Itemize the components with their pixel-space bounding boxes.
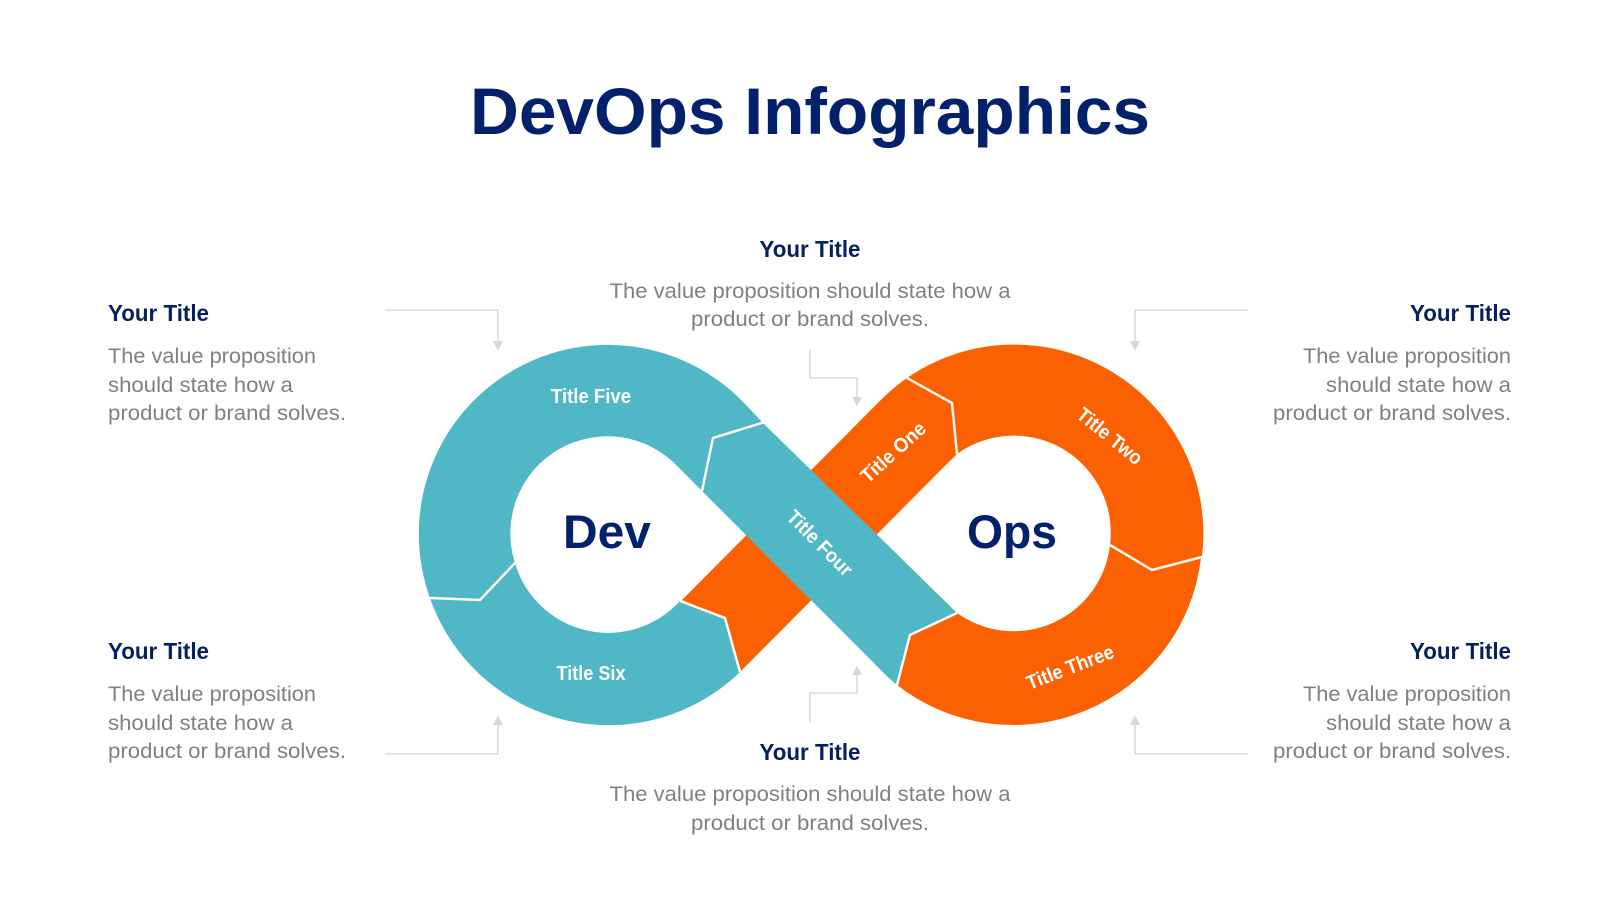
text block: bottom center: product or brand solves. [691, 812, 929, 835]
text block: bottom right: The value proposition [1303, 683, 1511, 706]
segment: Title Four (teal band) [702, 423, 957, 685]
label: Title Two: Title Two [1072, 404, 1147, 470]
label: Title Four: Title Four [782, 506, 857, 581]
text block: bottom right: should state how a [1326, 712, 1511, 735]
label: Ops: Ops [967, 505, 1057, 558]
text block: bottom right: Your Title [1410, 638, 1511, 664]
text block: bottom left: product or brand solves. [108, 740, 346, 763]
arrow: bottom right [1130, 715, 1248, 754]
infinity diagram [419, 345, 1203, 725]
text block: bottom center: Your Title [760, 739, 860, 765]
text block: top right: should state how a [1326, 374, 1511, 397]
text block: top left: Your Title [108, 300, 209, 326]
segment: Title Six [430, 563, 740, 725]
text block: bottom left [108, 638, 346, 763]
arrow: top center [810, 350, 862, 406]
segment: Title One (orange band) [682, 378, 957, 671]
arrow: top right [1130, 310, 1248, 351]
label: Title Six: Title Six [556, 663, 626, 685]
arrow: top left [385, 310, 503, 351]
title: DevOps Infographics [470, 74, 1150, 148]
text block: bottom left: The value proposition [108, 683, 316, 706]
label: Title Five: Title Five [551, 386, 631, 408]
segment: Title Three [897, 545, 1201, 725]
text block: top left: product or brand solves. [108, 402, 346, 425]
text block: top left: should state how a [108, 374, 293, 397]
text block: top right: Your Title [1410, 300, 1511, 326]
arrow: bottom center [810, 666, 862, 722]
text block: top right: The value proposition [1303, 345, 1511, 368]
segment: Title Five [419, 345, 763, 600]
text block: top right: product or brand solves. [1273, 402, 1511, 425]
label: Dev: Dev [563, 505, 651, 558]
text block: top center: Your Title [760, 236, 860, 262]
text block: top right [1273, 300, 1511, 425]
arrow: bottom left [385, 715, 503, 754]
text block: bottom center: The value proposition should state how a [610, 783, 1011, 806]
text block: bottom left: should state how a [108, 712, 293, 735]
text block: top left [108, 300, 346, 425]
text block: bottom right: product or brand solves. [1273, 740, 1511, 763]
text block: bottom center [610, 739, 1011, 835]
text block: top center: The value proposition should state how a [610, 280, 1011, 303]
text block: top left: The value proposition [108, 345, 316, 368]
label: Title One: Title One [857, 418, 931, 488]
segment: Title Two [907, 345, 1203, 570]
text block: top center: product or brand solves. [691, 308, 929, 331]
label: Title Three: Title Three [1023, 641, 1117, 695]
text block: bottom left: Your Title [108, 638, 209, 664]
text block: top center [610, 236, 1011, 331]
text block: bottom right [1273, 638, 1511, 763]
